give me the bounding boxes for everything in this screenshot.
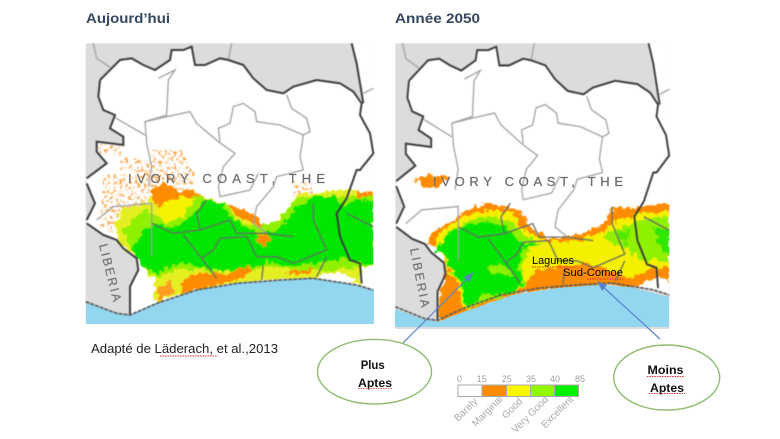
arrow: Plus Aptes to green zone [403,272,474,343]
Liberia label: LIBERIA [96,242,124,303]
legend class labels: Barely [452,396,480,424]
infographic canvas [84,13,720,432]
legend colour bar [458,385,578,396]
borders [86,43,373,315]
legend class labels [452,394,576,436]
legend values: 0 [457,374,462,384]
heading: Aujourd'hui: Aujourd’hui [86,11,170,26]
legend class labels: Marginal [470,394,505,429]
callout: Moins Aptes: Aptes [650,383,684,395]
map base: land and neighbours [86,43,373,323]
legend values: 85 [575,374,585,384]
legend: suitability scale [452,374,585,436]
legend values: 15 [477,374,487,384]
callout: Plus Aptes: Aptes [358,378,392,390]
sea [395,285,669,327]
legend values: 25 [502,374,512,384]
callout: Plus Aptes [318,339,432,404]
panel: map today [86,43,374,324]
borders [395,43,669,320]
sea [86,278,374,324]
legend values [457,374,585,384]
callout: Plus Aptes: Plus [361,360,385,372]
source caption: Adapté de Läderach, et al.,2013 [91,342,278,356]
suitability zones: today [115,182,373,302]
suitability speckles: today [97,143,313,233]
region label: Sud-Comoe: Sud-Comoe [563,267,623,279]
legend values: 40 [550,374,560,384]
arrow: Moins Aptes to coast [597,281,660,339]
callout: Moins Aptes: Moins [648,365,684,377]
country label: IVORY COAST, THE [128,171,325,186]
map base: land and neighbours [395,43,669,329]
legend class labels: Good [500,396,525,421]
Liberia label: LIBERIA [407,247,432,308]
legend class labels: Very Good [510,394,551,436]
callout: Moins Aptes [614,345,720,410]
heading: Année 2050: Année 2050 [395,11,480,26]
region label: Lagunes: Lagunes [532,255,574,267]
suitability zones: 2050 [415,175,669,322]
panel: map 2050 [395,43,669,329]
country label: IVORY COAST, THE [433,174,623,189]
legend class labels: Excellent [540,394,576,431]
legend values: 35 [526,374,536,384]
